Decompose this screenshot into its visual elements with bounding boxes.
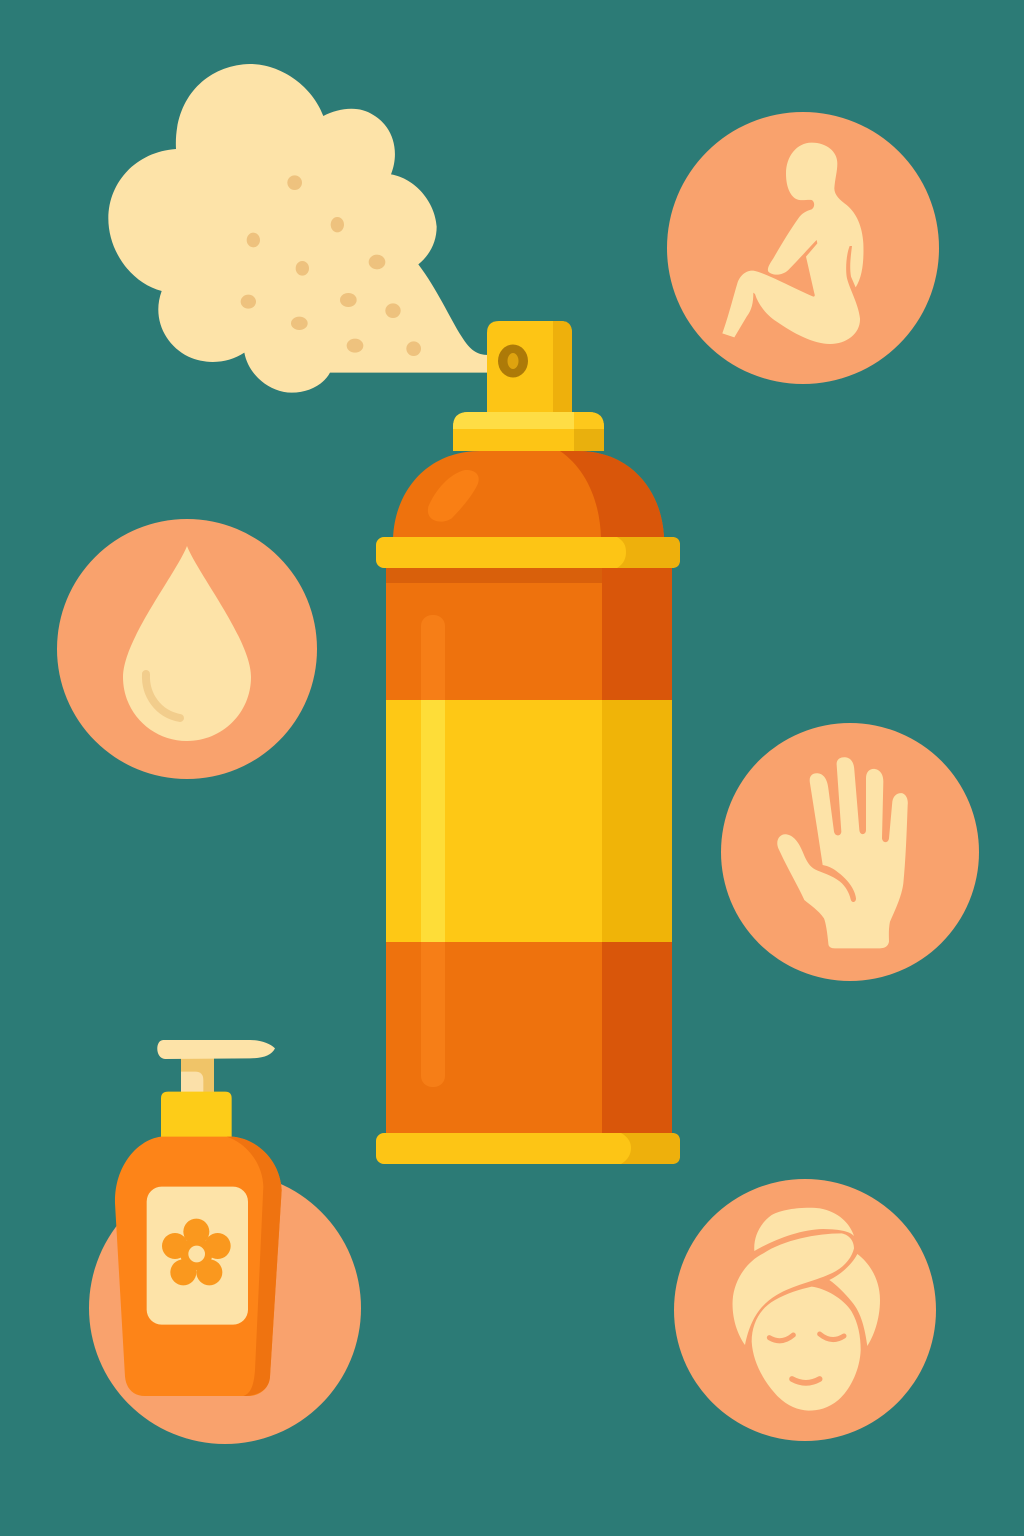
bottom rim xyxy=(376,1133,680,1164)
yellow label band xyxy=(386,700,672,942)
collar xyxy=(453,412,604,451)
flower xyxy=(162,1219,231,1285)
bottle body xyxy=(115,1137,282,1396)
can body xyxy=(386,566,672,1134)
icon: droplet xyxy=(57,519,317,779)
top rim xyxy=(376,537,680,568)
icon: open hand xyxy=(721,723,979,981)
facial features xyxy=(769,1334,844,1383)
towel xyxy=(733,1208,880,1346)
icon: seated body xyxy=(667,112,939,384)
bottle label xyxy=(147,1187,248,1325)
pump xyxy=(157,1040,275,1137)
icon: face with towel xyxy=(674,1179,936,1441)
cloud particles xyxy=(241,175,421,356)
highlight strip xyxy=(421,615,445,1087)
dome xyxy=(393,451,664,538)
nozzle xyxy=(487,321,572,414)
icon: lotion bottle xyxy=(89,1040,361,1444)
dome highlight xyxy=(428,470,479,522)
spray can xyxy=(376,321,680,1164)
spray cloud xyxy=(108,64,488,393)
face xyxy=(752,1287,861,1411)
